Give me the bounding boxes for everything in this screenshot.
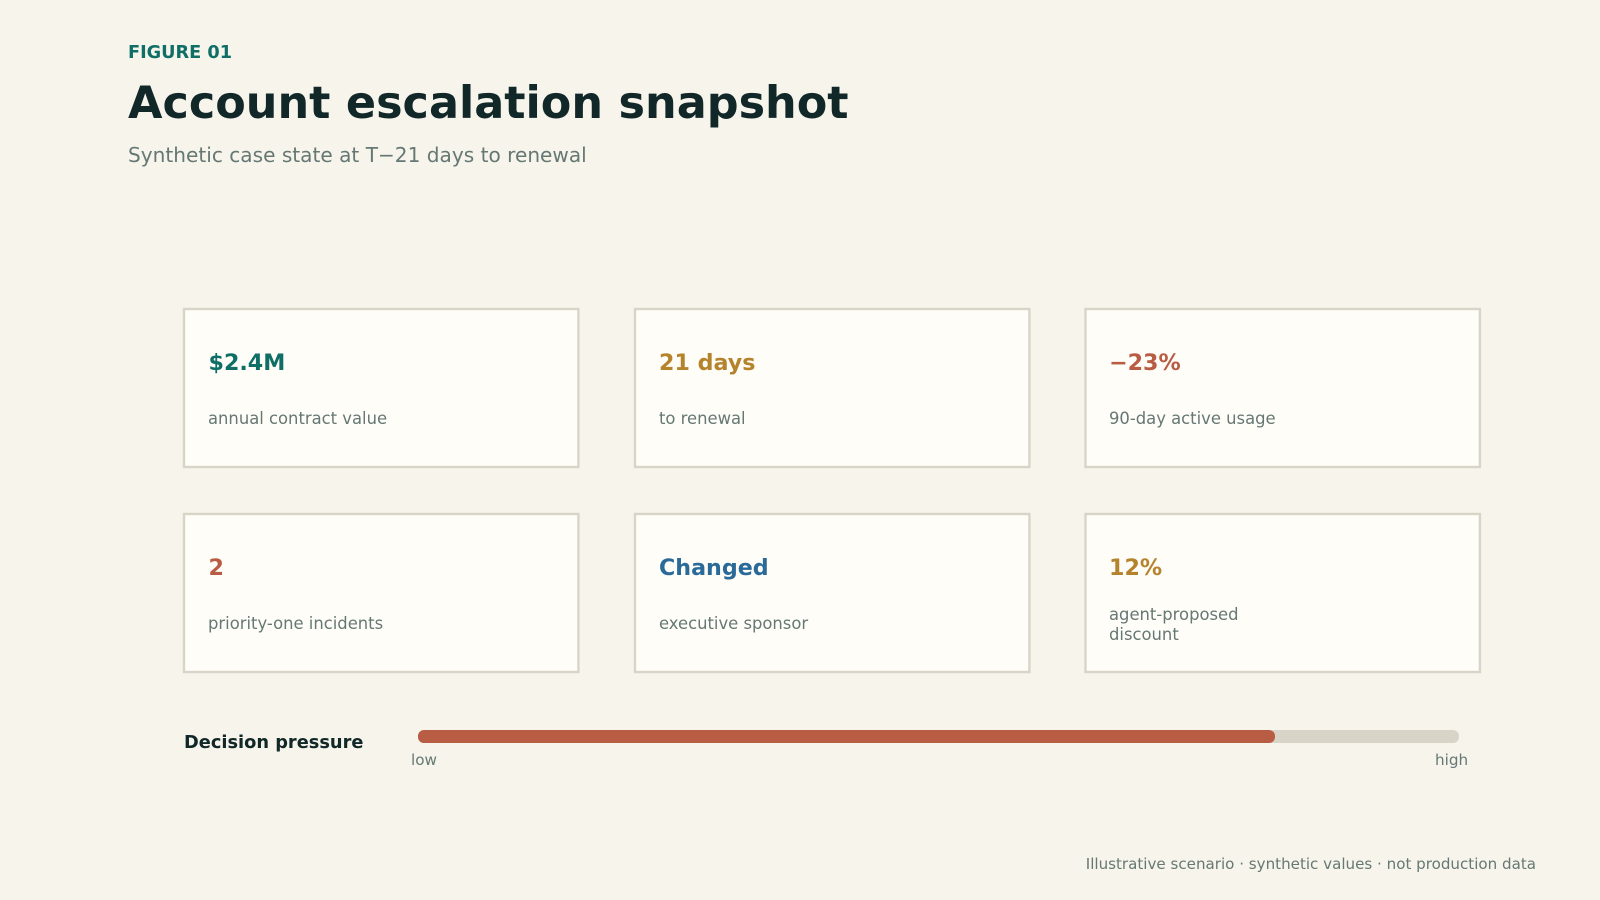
value: Changed: Changed <box>659 555 769 581</box>
value: 12%: 12% <box>1109 555 1162 581</box>
label: to renewal: to renewal <box>659 409 746 428</box>
label: agent-proposed discount: agent-proposed discount <box>1109 604 1239 644</box>
eyebrow: figure label: FIGURE 01 <box>128 43 232 63</box>
card frame: active usage <box>1086 309 1480 467</box>
card frame: executive sponsor <box>635 514 1029 672</box>
gauge label: high: high <box>1435 751 1468 769</box>
value: $2.4M: $2.4M <box>208 350 285 376</box>
card frame: days to renewal <box>635 309 1029 467</box>
label: executive sponsor: executive sponsor <box>659 614 808 633</box>
label: 90-day active usage: 90-day active usage <box>1109 409 1276 428</box>
label: priority-one incidents: priority-one incidents <box>208 614 383 633</box>
decision pressure label: Decision pressure <box>184 732 363 752</box>
footnote: Illustrative scenario · synthetic values · not production data <box>1086 855 1536 873</box>
title: Account escalation snapshot <box>128 78 849 128</box>
value: 2: 2 <box>208 555 224 581</box>
card frame: annual contract value <box>184 309 578 467</box>
gauge label: low: low <box>411 751 437 769</box>
decision pressure gauge <box>418 730 1459 743</box>
card frame: priority-one incidents <box>184 514 578 672</box>
subtitle: Synthetic case state at T−21 days to renewal <box>128 143 587 167</box>
label: annual contract value: annual contract value <box>208 409 387 428</box>
value: 21 days: 21 days <box>659 350 755 376</box>
card frame: agent-proposed discount <box>1086 514 1480 672</box>
value: -23%: −23% <box>1109 350 1181 376</box>
